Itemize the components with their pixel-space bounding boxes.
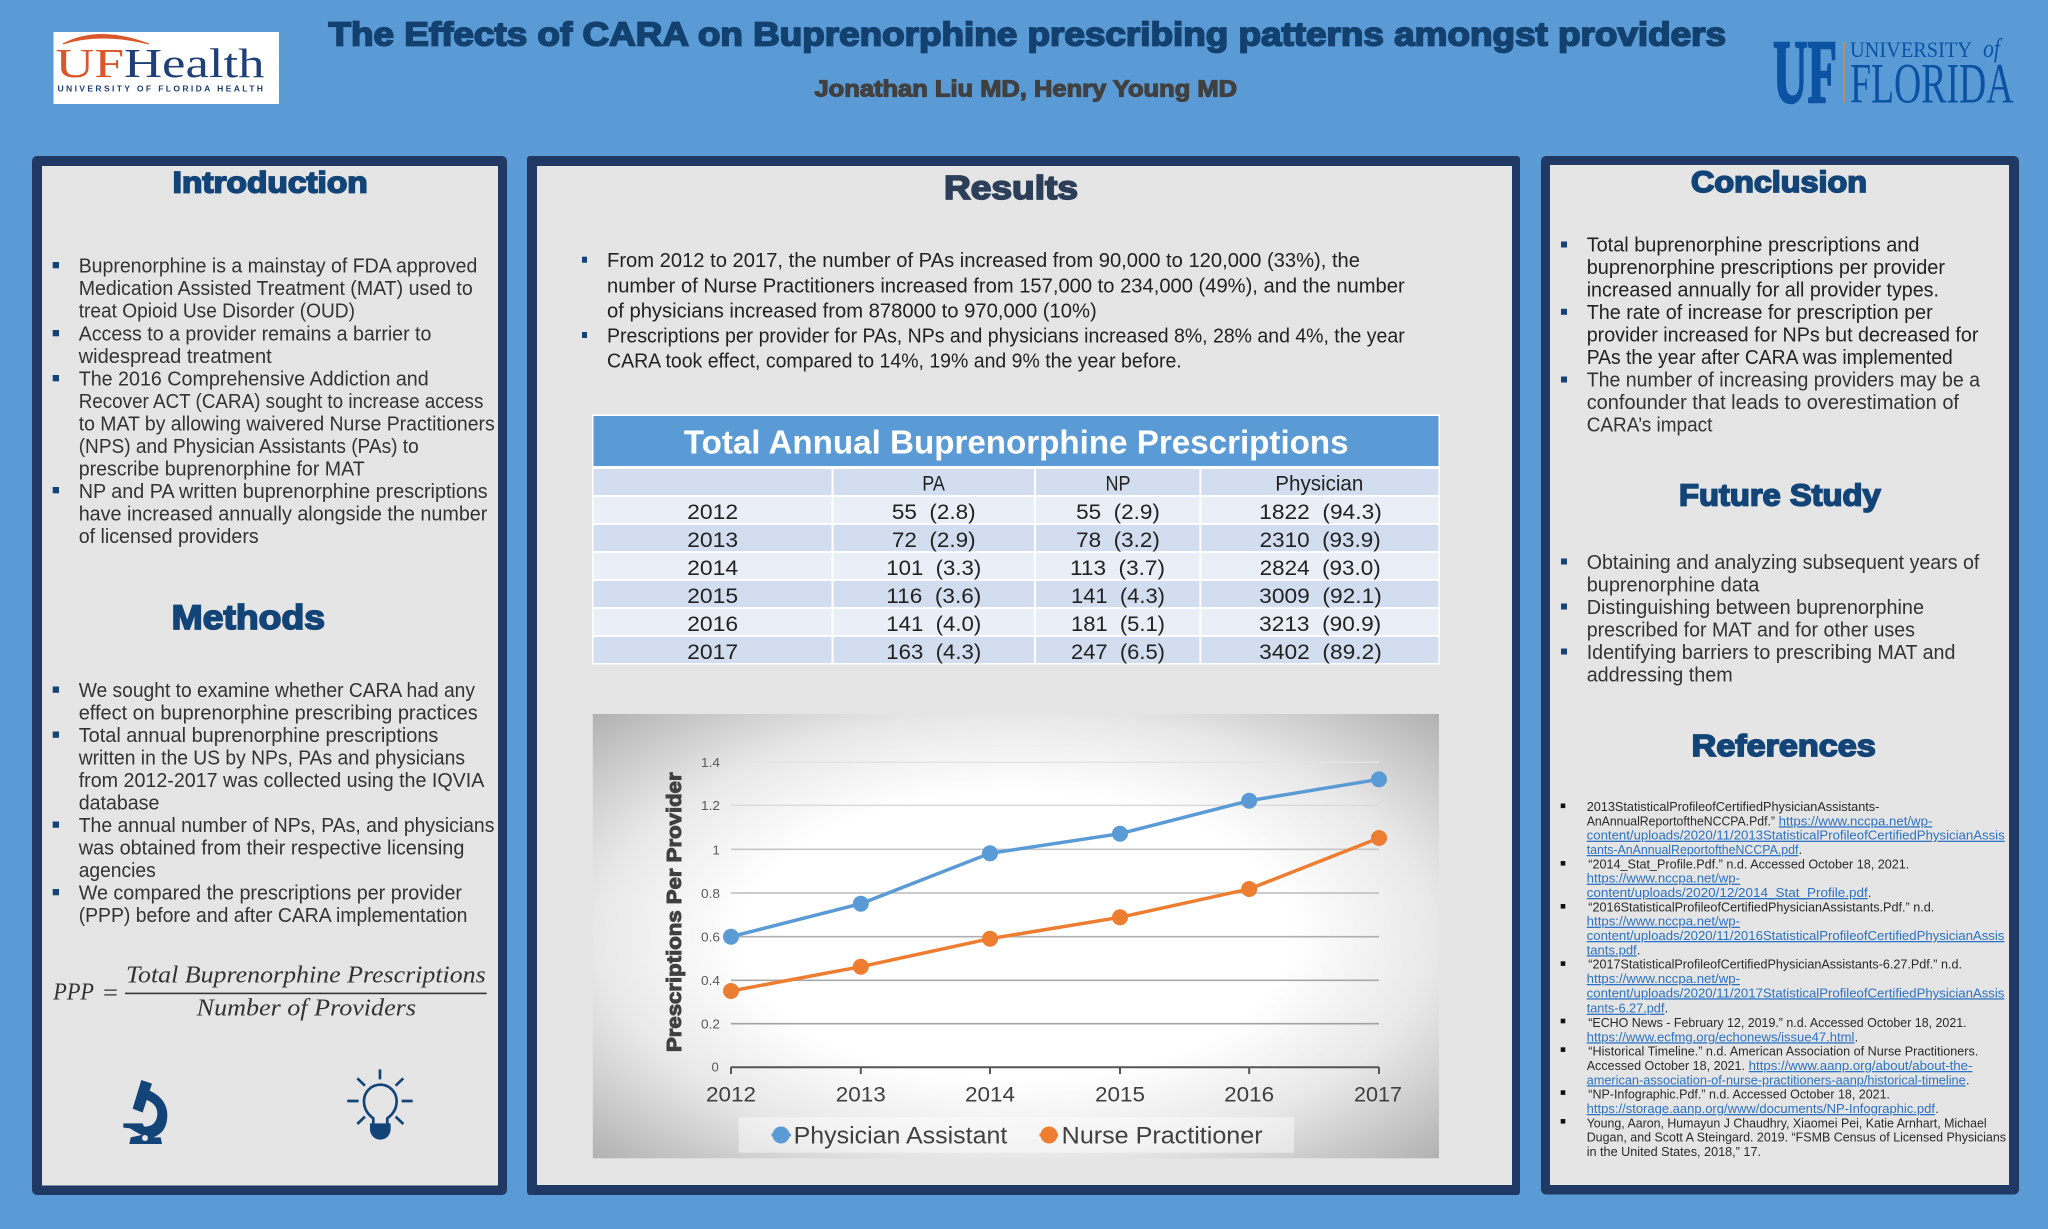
text block: references list: tants.pdf	[1587, 943, 1637, 957]
table rows: 55 (2.8)	[892, 501, 976, 524]
table rows: 163 (4.3)	[886, 641, 981, 664]
y axis labels: 1.2	[701, 798, 720, 813]
text block: references list: “NP-Infographic.Pdf.” n.d. Accessed October 18, 2021.	[1588, 1088, 1890, 1102]
text block: results bullets	[582, 250, 1405, 372]
y axis labels: 0	[712, 1060, 719, 1075]
table rows: 1822 (94.3)	[1259, 501, 1382, 524]
table rows: Physician	[1275, 473, 1363, 496]
text block: references list: Young, Aaron, Humayun J Chaudhry, Xiaomei Pei, Katie Arnhart, Michael	[1587, 1116, 1987, 1130]
table rows: 247 (6.5)	[1071, 641, 1165, 664]
text block: introduction bullets: Access to a provider remains a barrier to	[79, 323, 431, 345]
table rows: 2016	[687, 613, 738, 636]
text block: references list: .	[1799, 843, 1802, 857]
text block: conclusion bullets: buprenorphine prescriptions per provider	[1587, 257, 1945, 279]
table rows: 2824 (93.0)	[1260, 557, 1381, 580]
text block: conclusion bullets: The number of increasing providers may be a	[1587, 370, 1981, 392]
formula: PPP: =	[103, 980, 118, 1006]
logo: UF Health	[54, 32, 279, 104]
text block: introduction bullets: prescribe buprenorphine for MAT	[79, 459, 365, 481]
logo: University of Florida: of	[1983, 34, 2003, 63]
text block: methods bullets: Total annual buprenorphine prescriptions	[79, 725, 438, 747]
table rows: 141 (4.0)	[886, 613, 981, 636]
text block: introduction bullets: NP and PA written buprenorphine prescriptions	[79, 481, 488, 503]
text block: references list: Dugan, and Scott A Steingard. 2019. “FSMB Census of Licensed Physicians	[1587, 1131, 2006, 1145]
table rows: 2014	[687, 557, 738, 580]
table rows: 181 (5.1)	[1071, 613, 1165, 636]
text block: references list: american-association-of-nurse-practitioners-aanp/historical-timeline	[1587, 1073, 1966, 1087]
table rows: 72 (2.9)	[892, 529, 976, 552]
y axis title: Prescriptions Per Provider	[664, 772, 686, 1052]
table rows	[594, 468, 1438, 664]
text block: references list: “2017StatisticalProfileofCertifiedPhysicianAssistants-6.27.Pdf.” n.d.	[1588, 958, 1962, 972]
chart legend	[739, 1117, 1294, 1153]
text block: references list: tants-AnAnnualReportoftheNCCPA.pdf	[1587, 843, 1799, 857]
formula: PPP: Number of Providers	[196, 995, 416, 1021]
heading: references: References	[1692, 728, 1876, 763]
text block: references list: .	[1966, 1073, 1970, 1087]
table rows: 116 (3.6)	[886, 585, 981, 608]
text block: methods bullets: agencies	[79, 860, 156, 882]
text block: references list: https://www.nccpa.net/wp-	[1587, 872, 1740, 886]
text block: methods bullets: We compared the prescriptions per provider	[79, 882, 462, 904]
text block: introduction bullets: Buprenorphine is a mainstay of FDA approved	[79, 255, 477, 277]
series: physician assistant	[723, 771, 1387, 945]
text block: introduction bullets: to MAT by allowing waivered Nurse Practitioners	[79, 414, 495, 436]
heading: results: Results	[944, 169, 1078, 206]
y axis labels: 0.8	[701, 886, 720, 901]
text block: conclusion bullets: increased annually for all provider types.	[1587, 280, 1939, 302]
text block: methods bullets: written in the US by NPs, PAs and physicians	[78, 748, 465, 770]
text block: references list: Accessed October 18, 2021.	[1587, 1059, 1745, 1073]
text block: future study bullets: buprenorphine data	[1587, 575, 1760, 597]
text block: results bullets: of physicians increased from 878000 to 970,000 (10%)	[607, 300, 1097, 322]
heading: conclusion: Conclusion	[1691, 166, 1867, 199]
y axis labels: 1	[712, 842, 720, 858]
icon: microscope	[123, 1080, 167, 1144]
text block: introduction bullets: widespread treatment	[78, 346, 272, 368]
heading: introduction: Introduction	[173, 167, 368, 200]
text block: references list: .	[1935, 1102, 1939, 1116]
text block: conclusion bullets: PAs the year after CARA was implemented	[1587, 347, 1953, 369]
text block: future study bullets: prescribed for MAT and for other uses	[1587, 620, 1915, 642]
text block: references list: 2013StatisticalProfileofCertifiedPhysicianAssistants-	[1587, 800, 1879, 814]
table rows: 2015	[687, 585, 738, 608]
y axis labels: 0.2	[701, 1016, 720, 1032]
series: nurse practitioner	[723, 830, 1387, 999]
text block: references list: content/uploads/2020/12/2014_Stat_Profile.pdf	[1587, 886, 1868, 900]
x axis labels: 2012	[706, 1084, 756, 1107]
text block: references list: https://www.ecfmg.org/echonews/issue47.html	[1587, 1030, 1854, 1044]
text block: references list: https://www.aanp.org/about/about-the-	[1749, 1059, 1972, 1073]
text block: results bullets: From 2012 to 2017, the number of PAs increased from 90,000 to 120,000 (33%), the	[607, 250, 1360, 272]
text block: references list: content/uploads/2020/11/2017StatisticalProfileofCertifiedPhysicianAssis	[1587, 986, 2004, 1000]
formula: PPP: PPP	[52, 979, 94, 1005]
text block: references list: content/uploads/2020/11/2016StatisticalProfileofCertifiedPhysicianAssis	[1587, 929, 2004, 943]
table rows: 3009 (92.1)	[1259, 585, 1382, 608]
formula: PPP: Total Buprenorphine Prescriptions	[126, 963, 486, 989]
text block: introduction bullets: (NPS) and Physician Assistants (PAs) to	[79, 436, 419, 458]
table rows: 2017	[687, 641, 738, 664]
panel: results	[527, 156, 1520, 1195]
table rows: 113 (3.7)	[1070, 557, 1165, 580]
table rows: 2012	[687, 501, 738, 524]
table rows: 3402 (89.2)	[1259, 641, 1382, 664]
text block: conclusion bullets: provider increased for NPs but decreased for	[1587, 325, 1979, 347]
logo: UF Health: UF	[56, 40, 124, 86]
logo: University of Florida: UF	[1773, 23, 1837, 122]
x axis labels: 2016	[1224, 1084, 1274, 1107]
text block: references list: .	[1665, 1002, 1668, 1016]
logo: UF Health: Health	[124, 40, 264, 86]
formula: PPP	[52, 963, 487, 1021]
title: The Effects of CARA on Buprenorphine prescribing patterns amongst providers	[328, 16, 1726, 53]
text block: references list: https://www.nccpa.net/wp-	[1587, 972, 1740, 986]
text block: introduction bullets: have increased annually alongside the number	[79, 504, 488, 526]
text block: references list: “2014_Stat_Profile.Pdf.” n.d. Accessed October 18, 2021.	[1588, 857, 1909, 871]
text block: introduction bullets	[53, 255, 495, 548]
text block: introduction bullets: Recover ACT (CARA) sought to increase access	[79, 391, 483, 413]
text block: future study bullets: Distinguishing between buprenorphine	[1587, 597, 1924, 619]
line chart: prescriptions per provider	[593, 714, 1439, 1158]
text block: introduction bullets: of licensed providers	[79, 526, 259, 548]
table rows: PA	[922, 473, 945, 496]
text block: methods bullets: from 2012-2017 was collected using the IQVIA	[79, 770, 485, 792]
table title: Total Annual Buprenorphine Prescriptions	[684, 423, 1349, 460]
logo: University of Florida: UNIVERSITY	[1850, 37, 1972, 62]
text block: future study bullets: Obtaining and analyzing subsequent years of	[1587, 552, 1980, 574]
text block: references list: .	[1868, 886, 1871, 900]
text block: conclusion bullets: confounder that leads to overestimation of	[1587, 392, 1959, 414]
heading: methods: Methods	[172, 599, 325, 637]
text block: future study bullets	[1561, 552, 1980, 687]
chart legend: Physician Assistant	[794, 1122, 1008, 1149]
chart legend: Nurse Practitioner	[1062, 1122, 1263, 1149]
text block: methods bullets: was obtained from their respective licensing	[78, 838, 464, 860]
text block: introduction bullets: treat Opioid Use Disorder (OUD)	[79, 301, 355, 323]
text block: references list: “ECHO News - February 12, 2019.” n.d. Accessed October 18, 2021.	[1588, 1016, 1967, 1030]
text block: results bullets: Prescriptions per provider for PAs, NPs and physicians increased 8%, 28% and 4%, the year	[607, 325, 1405, 347]
text block: future study bullets: addressing them	[1587, 665, 1733, 687]
table rows: 2310 (93.9)	[1260, 529, 1381, 552]
x axis labels	[706, 1084, 1402, 1107]
text block: references list: content/uploads/2020/11/2013StatisticalProfileofCertifiedPhysicianAssis	[1587, 829, 2005, 843]
panel: introduction and methods	[32, 156, 507, 1195]
table title	[594, 416, 1438, 466]
table rows: 101 (3.3)	[886, 557, 981, 580]
text block: methods bullets: (PPP) before and after CARA implementation	[79, 905, 467, 927]
y axis labels: 0.6	[701, 930, 720, 944]
icon: light bulb	[347, 1069, 413, 1140]
text block: methods bullets	[53, 680, 494, 927]
x axis labels: 2015	[1095, 1084, 1145, 1107]
logo: UF Health: UNIVERSITY OF FLORIDA HEALTH	[58, 84, 263, 94]
table rows: 141 (4.3)	[1071, 585, 1165, 608]
text block: conclusion bullets: CARA’s impact	[1587, 415, 1713, 437]
text block: methods bullets: database	[79, 792, 159, 814]
authors: Jonathan Liu MD, Henry Young MD	[814, 76, 1237, 102]
text block: future study bullets: Identifying barriers to prescribing MAT and	[1587, 642, 1955, 664]
text block: references list: https://www.nccpa.net/wp-	[1587, 915, 1740, 929]
x axis labels: 2014	[965, 1084, 1015, 1107]
panel: conclusion, future study, references	[1541, 156, 2019, 1194]
text block: results bullets: CARA took effect, compared to 14%, 19% and 9% the year before.	[607, 350, 1182, 372]
text block: references list	[1561, 800, 2006, 1159]
text block: references list: https://www.nccpa.net/wp-	[1779, 814, 1932, 828]
x axis labels: 2013	[836, 1084, 886, 1107]
text block: references list: “2016StatisticalProfileofCertifiedPhysicianAssistants.Pdf.” n.d.	[1588, 900, 1934, 914]
text block: methods bullets: We sought to examine whether CARA had any	[79, 680, 475, 702]
text block: references list: tants-6.27.pdf	[1587, 1002, 1665, 1016]
text block: results bullets: number of Nurse Practitioners increased from 157,000 to 234,000 (49%), and the number	[607, 275, 1405, 297]
table rows: NP	[1106, 473, 1130, 496]
x axis labels: 2017	[1354, 1084, 1402, 1107]
table rows: 2013	[687, 529, 738, 552]
text block: methods bullets: effect on buprenorphine prescribing practices	[79, 702, 478, 724]
chart axes	[731, 1067, 1379, 1074]
table: total annual buprenorphine prescriptions	[592, 414, 1440, 664]
y axis labels	[701, 755, 720, 1075]
text block: conclusion bullets: Total buprenorphine prescriptions and	[1587, 235, 1919, 257]
text block: introduction bullets: The 2016 Comprehensive Addiction and	[79, 368, 429, 390]
y axis labels: 1.4	[701, 755, 720, 770]
text block: conclusion bullets: The rate of increase for prescription per	[1587, 302, 1933, 324]
logo: University of Florida	[1773, 23, 2014, 122]
table rows: 55 (2.9)	[1076, 501, 1160, 524]
text block: references list: https://storage.aanp.org/www/documents/NP-Infographic.pdf	[1587, 1102, 1935, 1116]
table rows: 3213 (90.9)	[1259, 613, 1381, 636]
text block: references list: “Historical Timeline.” n.d. American Association of Nurse Practitioners.	[1588, 1045, 1978, 1059]
text block: conclusion bullets	[1561, 235, 1981, 437]
text block: introduction bullets: Medication Assisted Treatment (MAT) used to	[79, 278, 473, 300]
heading: future study: Future Study	[1679, 478, 1881, 513]
table rows: 78 (3.2)	[1076, 529, 1160, 552]
text block: methods bullets: The annual number of NPs, PAs, and physicians	[79, 815, 494, 837]
text block: references list: AnAnnualReportoftheNCCPA.Pdf.”	[1587, 814, 1775, 828]
y axis labels: 0.4	[701, 973, 720, 988]
text block: references list: in the United States, 2018,” 17.	[1587, 1145, 1761, 1159]
text block: references list: .	[1855, 1030, 1858, 1044]
text block: references list: .	[1637, 943, 1640, 957]
